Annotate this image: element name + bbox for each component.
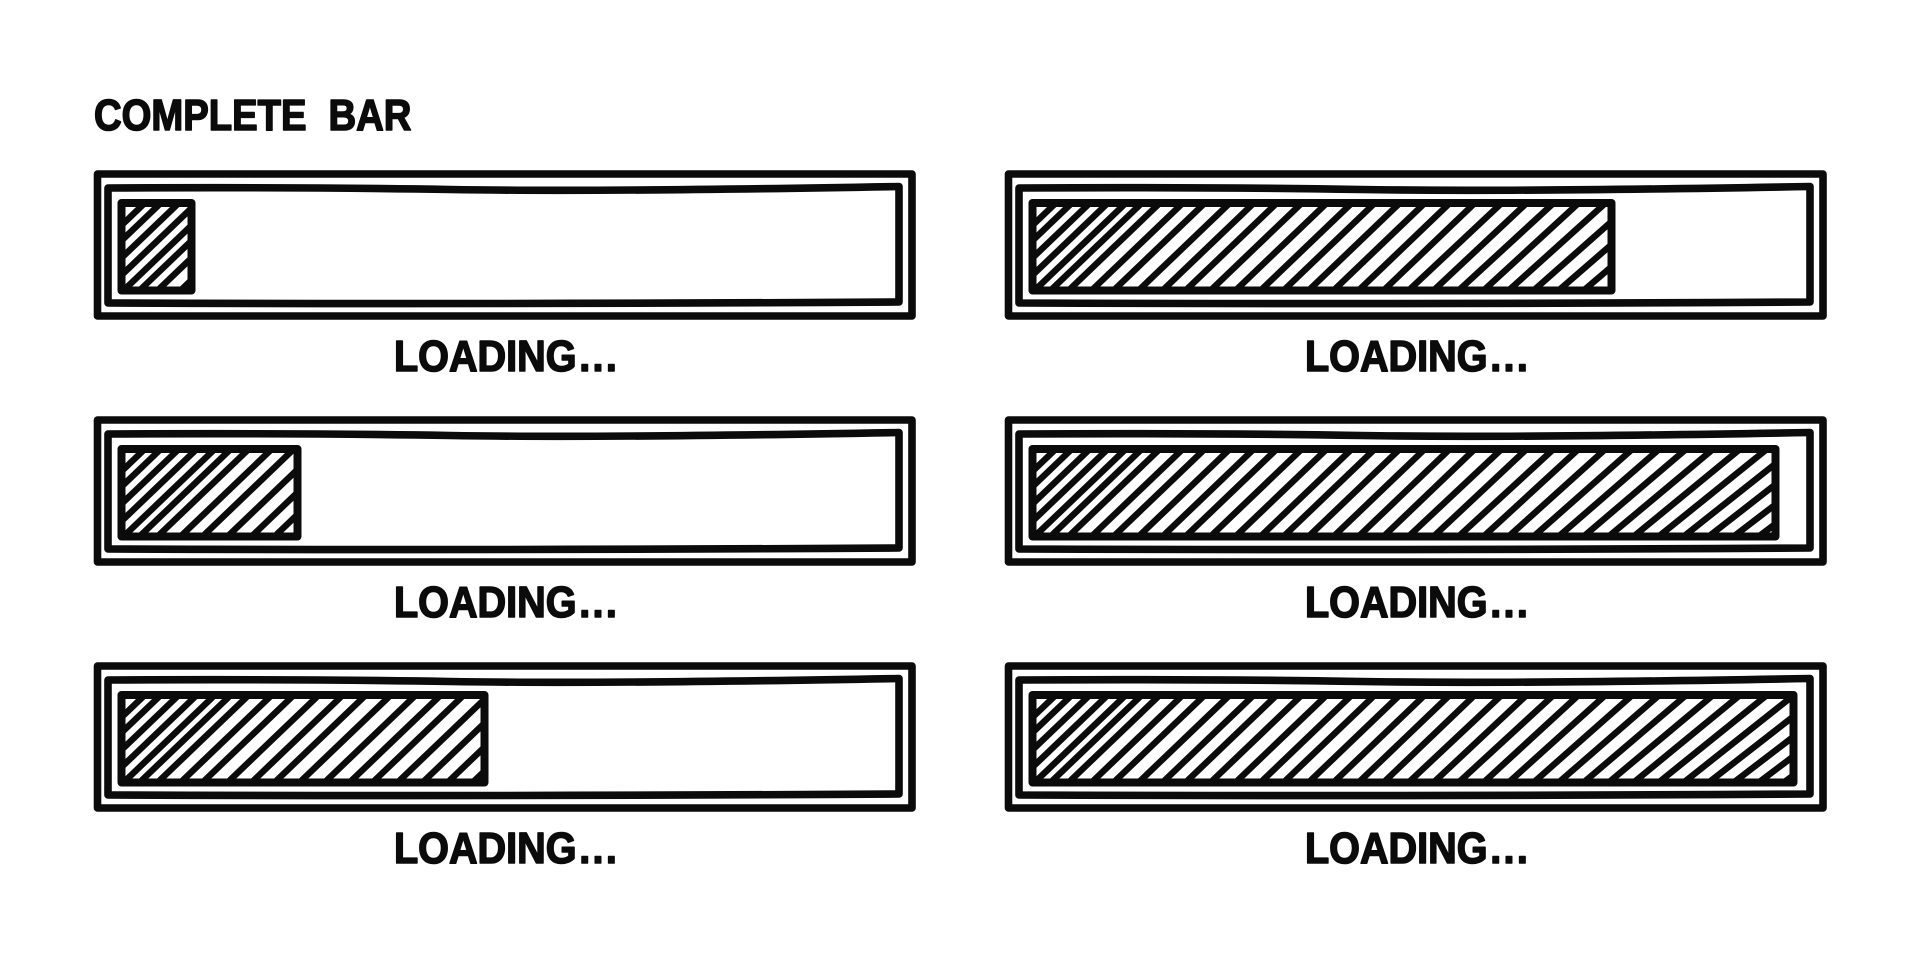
panel: progress bar 2: [94, 416, 916, 618]
bar frame 5: [1008, 420, 1823, 562]
title: COMPLETE BAR: [94, 91, 411, 140]
loading label 6: LOADING...: [1305, 823, 1530, 872]
hatched fill 5: [1028, 445, 1780, 540]
bar frame 6: [1008, 666, 1823, 808]
loading label 3: LOADING...: [394, 823, 619, 872]
hatched fill 6: [1028, 691, 1798, 786]
loading label 1: LOADING...: [394, 331, 619, 380]
panel: progress bar 1: [94, 170, 916, 372]
bar frame 4: [1008, 174, 1823, 316]
bar frame 1: [98, 174, 912, 316]
panel: progress bar 6: [1004, 662, 1827, 864]
hatched fill 2: [118, 445, 302, 540]
bar frame 2: [98, 420, 912, 562]
loading label 4: LOADING...: [1305, 331, 1530, 380]
panel: progress bar 4: [1004, 170, 1827, 372]
panel: progress bar 5: [1004, 416, 1827, 618]
loading label 2: LOADING...: [394, 577, 619, 626]
loading label 5: LOADING...: [1305, 577, 1530, 626]
panel: progress bar 3: [94, 662, 916, 864]
hatched fill 4: [1028, 199, 1616, 294]
hatched fill 3: [118, 691, 488, 786]
bar frame 3: [98, 666, 912, 808]
hatched fill 1: [118, 199, 196, 294]
